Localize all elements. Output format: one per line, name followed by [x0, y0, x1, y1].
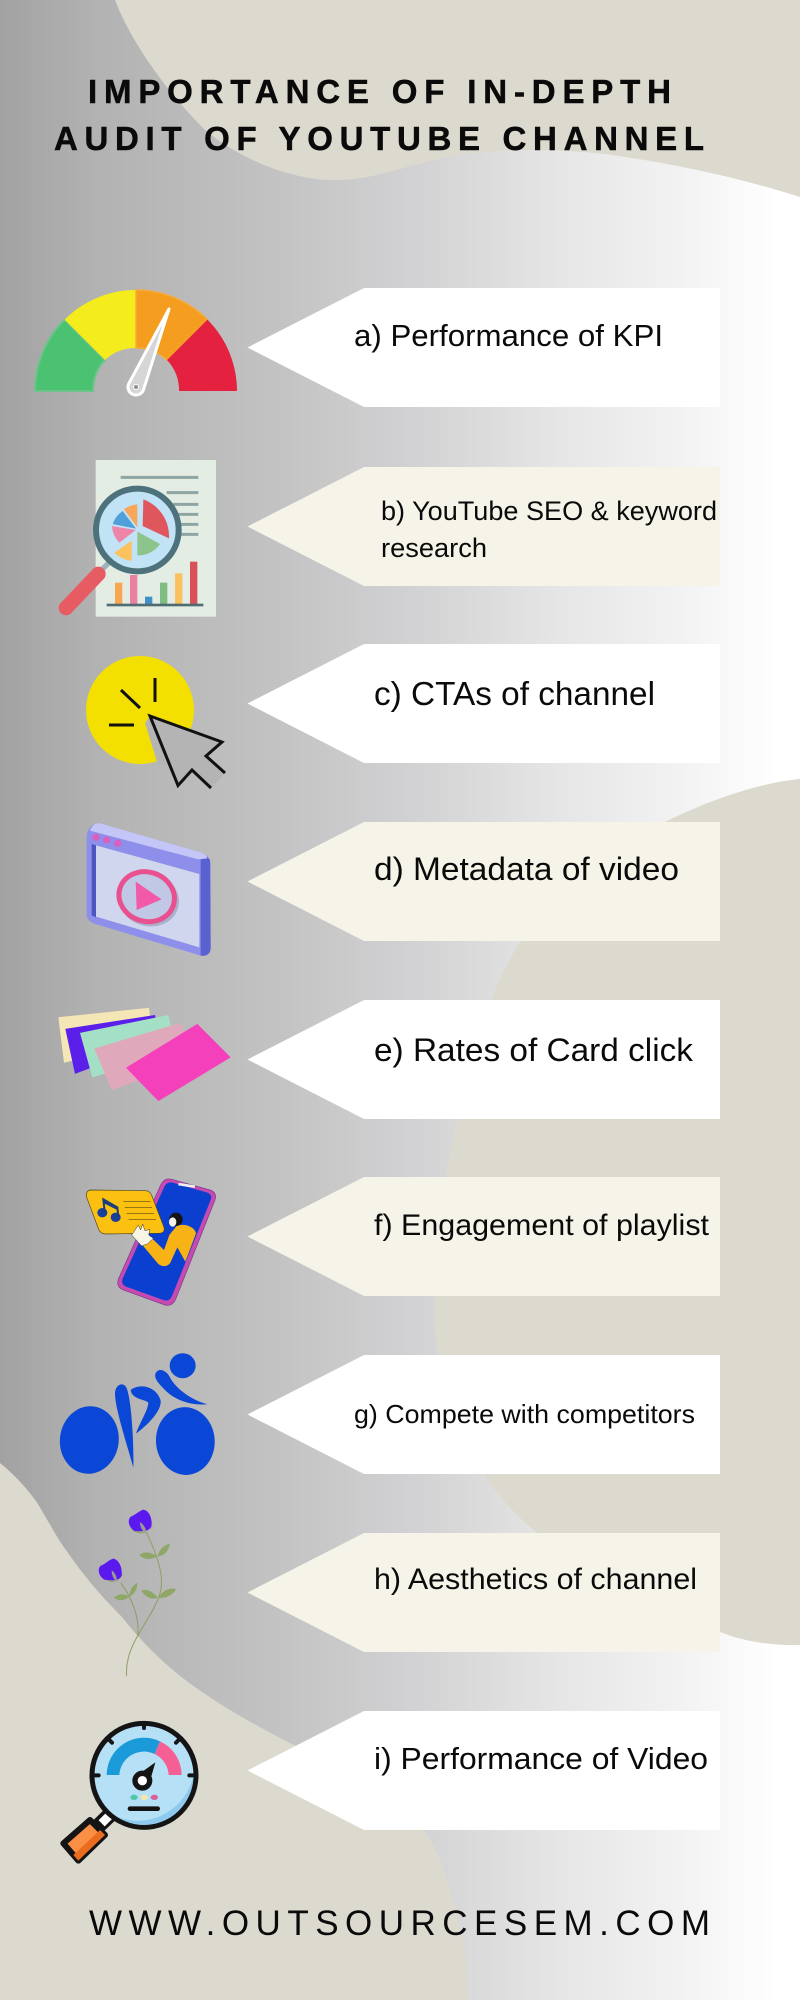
item a: banner: a) Performance of KPI [354, 318, 663, 353]
item e: banner: e) Rates of Card click [374, 1032, 694, 1068]
icon: cyclist [53, 1353, 219, 1481]
title: AUDIT OF YOUTUBE CHANNEL [54, 120, 704, 157]
item a: banner [248, 288, 720, 407]
icon: video player window [87, 823, 211, 956]
footer website url: WWW.OUTSOURCESEM.COM [89, 1904, 710, 1943]
item h: banner: h) Aesthetics of channel [374, 1563, 697, 1596]
item f: banner: f) Engagement of playlist [374, 1209, 710, 1242]
background shape: bottom-left blob [0, 1463, 468, 2000]
item b: banner: b) YouTube SEO & keyword [381, 496, 717, 526]
item i: banner [248, 1711, 720, 1830]
item d: banner: d) Metadata of video [374, 851, 679, 887]
icon: report with magnifying glass [66, 460, 216, 617]
icon: speedometer gauge [35, 290, 237, 395]
item d: banner [248, 822, 720, 941]
icon: phone with music playlist [86, 1179, 216, 1305]
item b: banner: research [381, 533, 487, 563]
item g: banner [248, 1355, 720, 1474]
item h: banner [248, 1533, 720, 1652]
item i: banner: i) Performance of Video [374, 1741, 708, 1776]
item c: banner: c) CTAs of channel [374, 675, 655, 712]
icon: click cursor [86, 656, 225, 788]
background shape: top blob [115, 0, 800, 197]
icon: stack of cards [58, 1008, 231, 1101]
icon: magnifier with speed dial [63, 1723, 196, 1861]
item g: banner: g) Compete with competitors [354, 1399, 695, 1429]
background shape: right blob [434, 779, 800, 1645]
title [54, 73, 704, 157]
icon: purple flowers [99, 1510, 176, 1676]
item b: banner [248, 467, 720, 586]
item c: banner [248, 644, 720, 763]
title: IMPORTANCE OF IN-DEPTH [88, 73, 671, 110]
item e: banner [248, 1000, 720, 1119]
item f: banner [248, 1177, 720, 1296]
